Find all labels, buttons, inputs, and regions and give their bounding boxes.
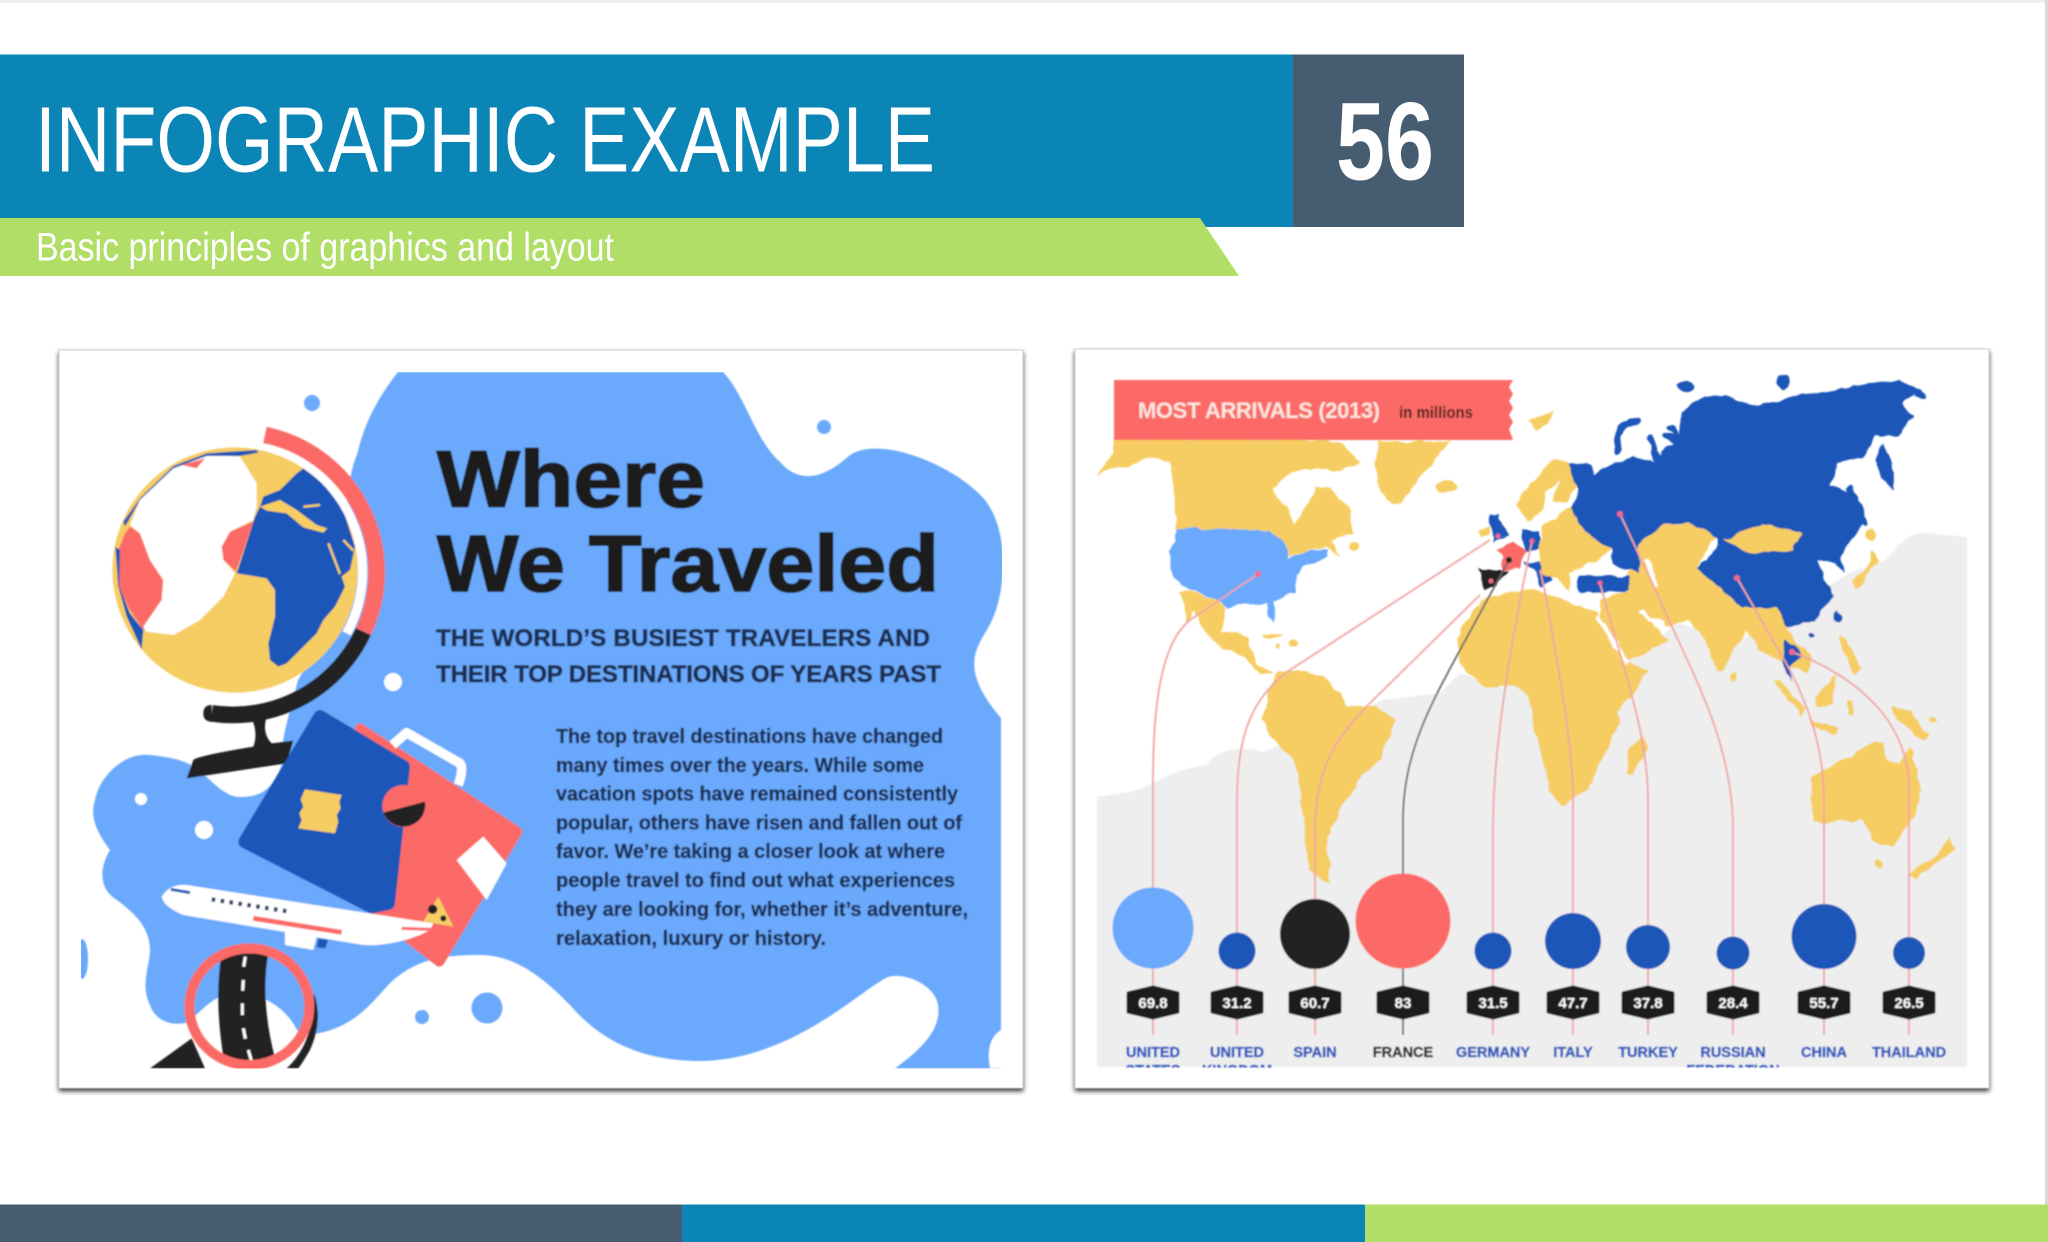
badge values: 47.7 <box>1558 995 1588 1012</box>
body text: The top travel destinations have changed <box>556 726 943 748</box>
usa <box>1170 528 1327 623</box>
globe ring coral <box>265 435 377 632</box>
body text: people travel to find out what experiences <box>556 870 955 892</box>
title bar <box>0 54 1293 227</box>
country labels: GERMANY <box>1456 1045 1530 1061</box>
heading: We Traveled <box>437 519 939 608</box>
country labels <box>1126 1046 1947 1069</box>
subtitle ribbon <box>0 218 1239 276</box>
badge values: 26.5 <box>1894 995 1924 1012</box>
country labels: STATES <box>1125 1063 1181 1079</box>
country labels: UNITED <box>1126 1045 1180 1061</box>
thailand <box>1783 640 1802 683</box>
slide number box <box>1293 54 1464 227</box>
ocean band <box>1097 533 1967 1067</box>
value badges <box>1128 987 1934 1018</box>
slide number box: 56 <box>1336 80 1434 204</box>
banner: most arrivals: MOST ARRIVALS (2013) <box>1138 398 1380 423</box>
panel frame right <box>1075 349 1989 1088</box>
subtitle: Basic principles of graphics and layout <box>36 226 614 270</box>
decorative dots <box>76 395 1001 1068</box>
badge values <box>1138 995 1924 1012</box>
japan and southeast asia islands <box>1730 529 1937 740</box>
france <box>1495 542 1525 570</box>
country labels: SPAIN <box>1293 1045 1337 1061</box>
country labels: CHINA <box>1801 1045 1847 1061</box>
world map <box>1097 374 1955 883</box>
Americas west <box>1097 410 1555 674</box>
bubble chart <box>1112 874 1925 970</box>
map and chart content <box>1097 374 1967 1079</box>
sticker white <box>457 837 507 900</box>
eurasia <box>1517 374 1937 740</box>
badge values: 69.8 <box>1138 995 1168 1012</box>
turkey <box>1578 577 1628 592</box>
panel: most arrivals map <box>1075 349 1989 1088</box>
sticker yellow <box>423 897 453 927</box>
globe ring black <box>212 632 363 715</box>
footer bar <box>0 1204 2048 1242</box>
badge values: 28.4 <box>1718 995 1748 1012</box>
country labels: TURKEY <box>1618 1045 1678 1061</box>
body text: many times over the years. While some <box>556 755 924 777</box>
banner: most arrivals: in millions <box>1399 403 1473 422</box>
globe ring white gap <box>267 448 363 633</box>
madagascar <box>1627 737 1647 775</box>
kamchatka and arctic islands <box>1677 374 1927 638</box>
africa <box>1457 590 1648 807</box>
badge values: 31.2 <box>1222 995 1252 1012</box>
title: INFOGRAPHIC EXAMPLE <box>35 88 935 192</box>
badge values: 60.7 <box>1300 995 1330 1012</box>
suitcase front <box>245 717 403 907</box>
spain <box>1478 570 1510 592</box>
russia <box>1568 380 1920 627</box>
subheading: THEIR TOP DESTINATIONS OF YEARS PAST <box>436 661 941 688</box>
panel: where we traveled <box>59 350 1023 1088</box>
body text: popular, others have risen and fallen out of <box>556 812 962 834</box>
suitcase body <box>360 728 517 962</box>
scandinavia <box>1517 458 1575 522</box>
mongolia <box>1723 523 1802 553</box>
body text: relaxation, luxury or history. <box>556 928 826 950</box>
south america <box>1260 670 1397 883</box>
globe sphere <box>112 447 358 693</box>
background blob <box>93 372 1003 1068</box>
badge values: 83 <box>1395 995 1411 1012</box>
country labels: UNITED <box>1210 1045 1264 1061</box>
badge values: 37.8 <box>1633 995 1663 1012</box>
body text: they are looking for, whether it’s adventure, <box>556 899 968 921</box>
subheading: THE WORLD’S BUSIEST TRAVELERS AND <box>436 625 930 652</box>
panel frame left <box>59 350 1023 1088</box>
country labels: RUSSIAN <box>1700 1045 1766 1061</box>
map dots <box>1255 511 1795 655</box>
suitcase handle <box>393 733 462 785</box>
greenland <box>1375 442 1452 505</box>
stamp <box>298 789 342 833</box>
badge values: 55.7 <box>1809 995 1839 1012</box>
united kingdom <box>1488 513 1508 543</box>
body text: vacation spots have remained consistently <box>556 784 959 806</box>
header banner <box>0 54 1464 276</box>
country labels: FRANCE <box>1373 1045 1434 1061</box>
country labels: KINGDOM <box>1202 1063 1272 1079</box>
flight lines <box>1153 514 1909 1035</box>
body text: favor. We’re taking a closer look at where <box>556 841 945 863</box>
gulfs <box>1597 560 1665 664</box>
subheading <box>435 628 942 684</box>
small arctic islands <box>1348 410 1555 550</box>
germany <box>1522 530 1540 553</box>
icon: suitcase <box>245 717 517 962</box>
country labels: FEDERATION <box>1686 1063 1780 1079</box>
eastern europe <box>1538 508 1612 592</box>
illustration and copy <box>76 372 1003 1068</box>
body text <box>556 726 968 950</box>
heading: Where <box>437 434 705 524</box>
icon: airplane <box>162 885 433 950</box>
country labels: ITALY <box>1553 1045 1593 1061</box>
italy <box>1523 562 1553 588</box>
badge values: 31.5 <box>1478 995 1508 1012</box>
banner: most arrivals <box>1114 380 1513 440</box>
icon: road in ring <box>150 948 318 1068</box>
australia and new zealand <box>1810 743 1955 878</box>
clasp <box>382 785 425 827</box>
north america <box>1097 438 1360 557</box>
mexico and central america <box>1180 590 1275 674</box>
heading <box>435 446 936 594</box>
caribbean <box>1262 634 1299 648</box>
icon: globe <box>112 435 377 778</box>
southern asia <box>1600 523 1812 672</box>
globe stand <box>187 717 293 778</box>
country labels: THAILAND <box>1872 1045 1946 1061</box>
